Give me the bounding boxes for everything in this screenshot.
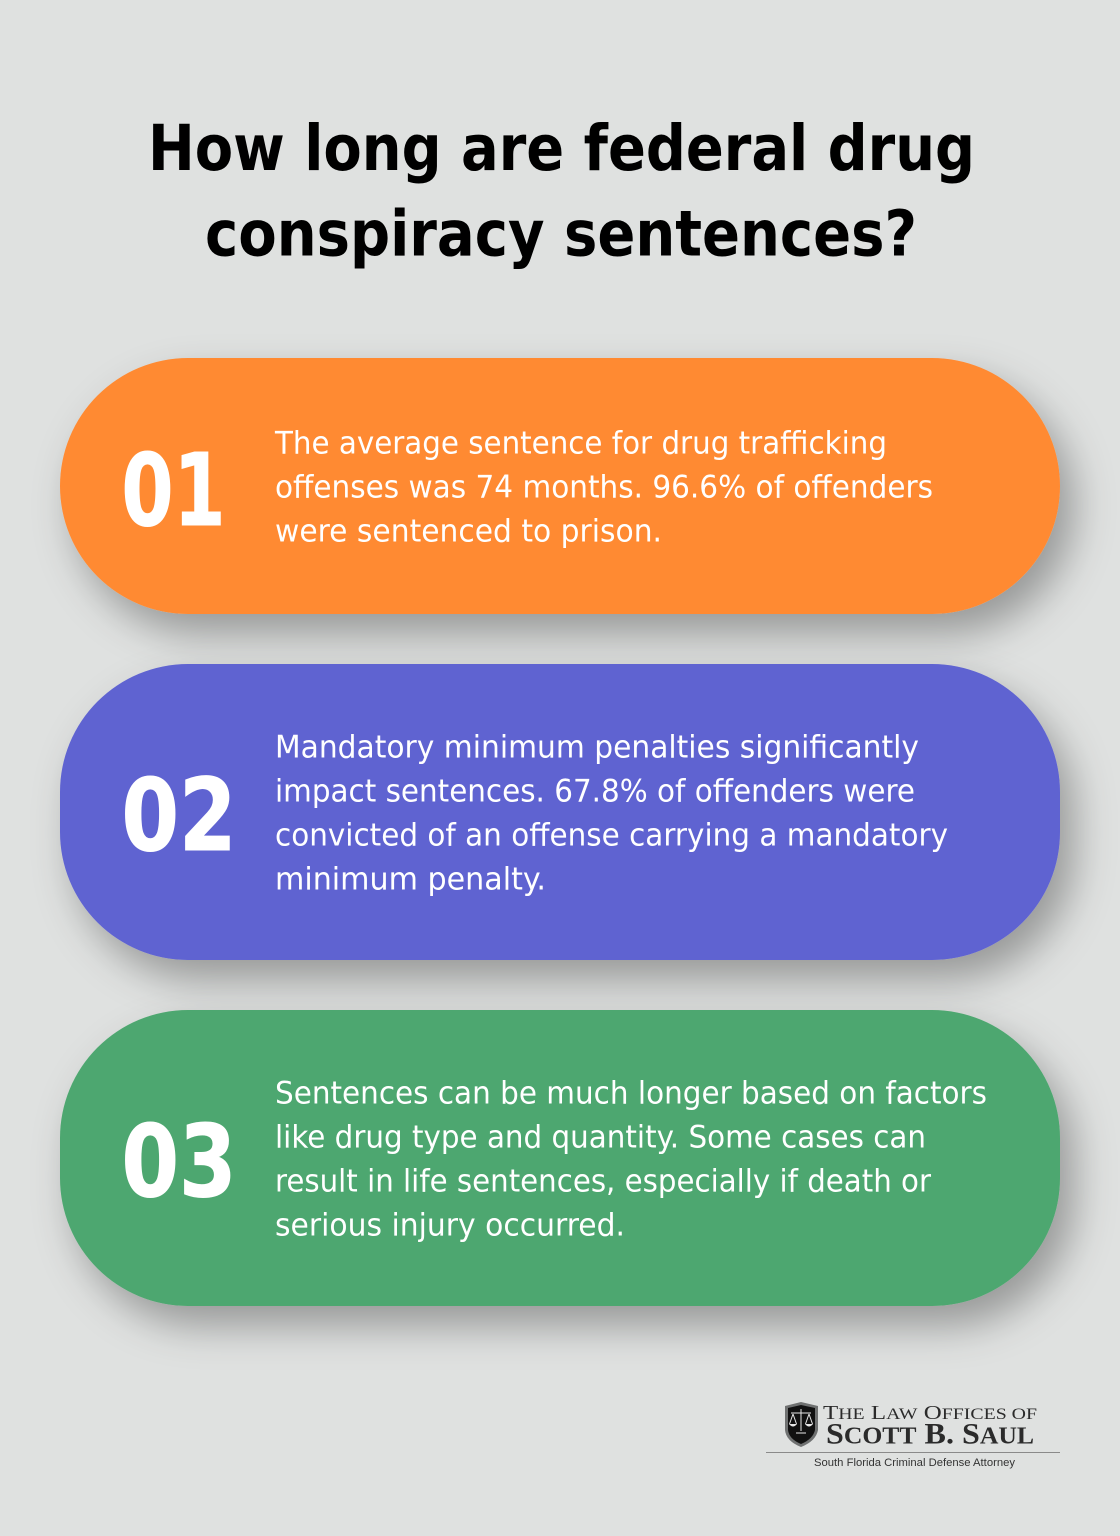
text block: card 03: result in life sentences, especially if death or	[275, 1164, 931, 1200]
icon: shield with scales	[785, 1402, 818, 1447]
text block: card 01: The average sentence for drug trafficking	[274, 426, 887, 462]
logo text	[823, 1403, 1037, 1450]
text block: card 01: offenses was 74 months. 96.6% of offenders	[275, 470, 933, 506]
text block: card 01	[274, 426, 933, 550]
number 03: 03	[122, 1103, 236, 1220]
text block: card 03: Sentences can be much longer based on factors	[275, 1076, 987, 1112]
title	[148, 112, 975, 270]
text block: card 02: impact sentences. 67.8% of offenders were	[275, 774, 915, 810]
logo text: THE L AW O FFICES OF	[823, 1403, 1037, 1424]
logo text: SCOTT B. SAUL	[826, 1418, 1034, 1450]
title: conspiracy sentences?	[205, 198, 917, 270]
panel: card 02 purple	[60, 664, 1060, 960]
number 02: 02	[122, 757, 236, 874]
text block: card 02: Mandatory minimum penalties significantly	[275, 730, 919, 766]
panel: card 01 orange	[60, 358, 1060, 614]
panel: card 03 green	[60, 1010, 1060, 1306]
text block: card 01: were sentenced to prison.	[275, 514, 662, 550]
text block: card 03	[275, 1076, 987, 1244]
logo: The Law Offices of Scott B. Saul	[766, 1402, 1060, 1469]
text block: card 02: convicted of an offense carrying a mandatory	[275, 818, 948, 854]
title: How long are federal drug	[148, 112, 975, 185]
number 01: 01	[122, 432, 226, 549]
text block: card 02: minimum penalty.	[275, 862, 546, 898]
text block: card 02	[275, 730, 948, 898]
logo tagline: South Florida Criminal Defense Attorney	[814, 1457, 1016, 1469]
text block: card 03: serious injury occurred.	[275, 1208, 625, 1244]
text block: card 03: like drug type and quantity. Some cases can	[275, 1120, 926, 1156]
